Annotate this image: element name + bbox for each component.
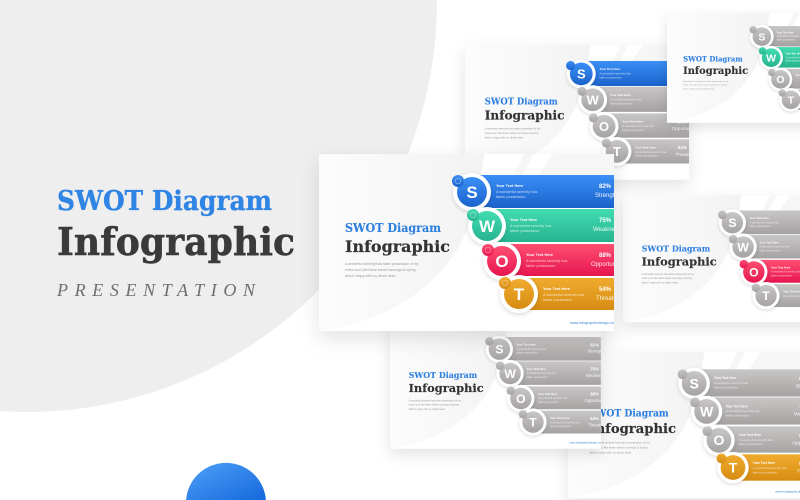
row T [602,137,692,166]
row O highlighted: Your Text Here [771,265,791,269]
slide: top right, W highlighted: which I enjoy with my whole heart. [683,87,715,90]
row O: O [599,119,609,134]
row T highlighted: T [729,459,738,475]
row S: Your Text Here [714,376,737,380]
slide: top centre, S highlighted: Infographic [485,108,565,122]
slide: centre main, all colours [319,154,622,331]
row T [779,88,800,112]
slide: middle right, O highlighted: entire soul, like these sweet mornings of spring [642,277,693,280]
row W: taken possession [527,375,548,379]
row W highlighted [759,46,800,69]
blue decorative circle [186,463,266,500]
website credit: www.infographicdesign.com [570,321,617,325]
slide: bottom left, all grey: www.infographicdesign.com [569,441,604,445]
row O: opportunity, red: taken possession [526,264,555,268]
heading: Infographic: Infographic [57,219,295,264]
row W: Your Text Here [610,93,631,97]
row S: taken possession [777,38,796,41]
slide description: A wonderful serenity has taken possession of my [345,262,419,266]
row S: A wonderful serenity has [750,220,780,224]
row W: A wonderful serenity has [760,245,790,249]
row S highlighted: Strength [675,74,692,79]
row W: W [504,367,516,381]
heading: SWOT Diagram: SWOT Diagram [57,186,272,217]
row W: W [700,403,714,419]
row W [577,85,667,116]
slide: bottom left, all grey: A wonderful serenity has taken possession of my [409,399,462,402]
row W: taken possession [610,101,633,105]
row W: weakness, teal: 75% [599,218,612,224]
subheading: Presentation: PRESENTATION [56,280,256,300]
slide: bottom right, T highlighted: which I enjoy with my whole heart. [589,450,632,454]
row W: A wonderful serenity has [726,409,760,413]
row O: A wonderful serenity has [622,124,654,128]
slide description [345,262,419,278]
row S: S [690,375,699,391]
row O: Your Text Here [739,433,761,437]
row O: A wonderful serenity has [739,438,773,442]
row S: strength, blue: 82% [599,184,612,190]
row W: Weakness [586,373,606,378]
row O highlighted: O [749,265,759,279]
row T: A wonderful serenity has [550,421,580,425]
row T highlighted [716,452,800,483]
row T: 54% [678,145,687,150]
slide heading: SWOT Diagram: SWOT Diagram [345,221,441,235]
slide: top centre, S highlighted [465,45,696,180]
row O: O [516,392,526,406]
row O [702,425,800,456]
row W: weakness, teal: A wonderful serenity has [510,224,551,228]
row O: taken possession [739,442,763,446]
slide: top right, W highlighted: A wonderful serenity has taken possession of my [683,80,729,83]
row S: Strength [587,349,604,354]
row S: A wonderful serenity has [517,347,547,351]
row T: Your Text Here [635,145,656,149]
slide: bottom left, all grey: SWOT Diagram [409,371,477,381]
row O: O [776,74,785,86]
row S highlighted: 82% [678,67,687,72]
row O [589,112,696,141]
row T [752,282,800,309]
row O: Opportunity [584,398,607,403]
slide: middle right, O highlighted: SWOT Diagram [642,244,710,254]
row S highlighted: S [577,66,586,81]
row O: Your Text Here [622,120,643,124]
row T: threats, orange: A wonderful serenity has [543,293,584,297]
row S: strength, blue: taken possession [496,195,525,199]
row S: strength, blue [452,173,618,211]
slide: top centre, S highlighted: SWOT Diagram [485,96,558,107]
row S highlighted: taken possession [600,75,622,79]
slide: bottom right, T highlighted: A wonderful serenity has taken possession of my [589,441,651,445]
row O: opportunity, red: Your Text Here [526,252,554,257]
row O: 88% [590,392,599,397]
row S: strength, blue: A wonderful serenity has [496,190,537,194]
row W: taken possession [726,413,750,417]
slide: bottom right, T highlighted: entire soul, like these sweet mornings of spring [589,446,648,450]
row W: weakness, teal [467,207,621,245]
large grey background shape [0,0,437,412]
slide: top right, W highlighted [667,13,800,123]
row T: A wonderful serenity has [635,150,667,154]
slide: bottom right, T highlighted [568,352,800,498]
row T: 54% [590,416,599,421]
row W: 75% [678,93,687,98]
slide: top centre, S highlighted: entire soul, like these sweet mornings of spring [485,131,539,135]
slide: bottom left, all grey: entire soul, like these sweet mornings of spring [409,404,460,407]
slide: bottom right, T highlighted: Infographic [589,422,676,437]
row S: strength, blue: Your Text Here [496,183,524,188]
row S [718,209,800,236]
row O: opportunity, red: A wonderful serenity has [526,259,567,263]
row O: opportunity, red [482,242,622,280]
slide: middle right, O highlighted: which I enjoy with my whole heart. [642,281,679,284]
row O: opportunity, red: 88% [599,253,612,259]
row T: T [788,95,795,107]
slide: top centre, S highlighted: A wonderful serenity has taken possession of my [485,126,541,130]
row W: W [587,92,600,107]
row S: strength, blue: Strength [595,193,618,199]
row S [485,336,604,363]
row O [507,385,607,412]
slide description: which I enjoy with my whole heart. [345,274,397,278]
row S: A wonderful serenity has [714,381,749,385]
row S highlighted: Your Text Here [600,67,620,71]
row W highlighted: W [766,52,776,64]
slide: middle right, O highlighted: Infographic [642,255,717,269]
row O [768,68,800,91]
row W: taken possession [760,248,781,252]
row S: Your Text Here [750,216,769,220]
row W [690,396,800,427]
row T: taken possession [550,424,572,428]
row S highlighted [566,60,667,90]
row W: weakness, teal: W [479,217,496,236]
row S [678,368,800,399]
row T: threats, orange: Your Text Here [543,286,571,291]
row W: Weakness [673,100,695,105]
row T: Threats [676,152,692,157]
row T: Threats [588,422,603,427]
row O: 88% [678,119,687,124]
slide heading: Infographic: Infographic [345,237,450,256]
row O: taken possession [622,128,645,132]
row S: S [728,216,736,230]
slide: bottom right, T highlighted: SWOT Diagram [589,408,669,419]
row W [496,360,606,387]
row O highlighted: taken possession [771,273,792,277]
row O highlighted [740,258,800,286]
slide: bottom left, all grey [390,322,607,449]
row T: threats, orange: taken possession [543,298,572,302]
row W: Your Text Here [726,404,748,408]
slide: bottom left, all grey: which I enjoy with my whole heart. [409,408,446,411]
row S: taken possession [714,385,738,389]
row S: 82% [590,342,599,347]
row S [749,25,800,48]
row T: T [529,415,537,429]
slide: top right, W highlighted: SWOT Diagram [683,54,743,63]
slide description: entire soul, like these sweet mornings of spring [345,268,416,272]
row S: taken possession [750,224,771,228]
row O highlighted: A wonderful serenity has [771,270,800,274]
row S: taken possession [517,350,538,354]
row T highlighted: Your Text Here [753,461,775,465]
row T [519,409,603,436]
slide: top right, W highlighted: Infographic [683,66,748,77]
row S: S [495,342,503,356]
row S highlighted: A wonderful serenity has [600,72,631,76]
row S: Your Text Here [517,343,536,347]
row T: threats, orange [499,275,616,313]
row T highlighted: A wonderful serenity has [753,466,787,470]
row W [729,233,800,261]
row W: A wonderful serenity has [610,97,642,101]
slide: top right, W highlighted: entire soul, like these sweet mornings of spring [683,84,727,87]
row T: taken possession [635,154,658,158]
row T highlighted: taken possession [753,470,777,474]
row S: S [758,31,765,43]
row W: W [737,240,749,254]
slide: bottom left, all grey: Infographic [409,381,484,395]
row O: Your Text Here [538,392,558,396]
row O: A wonderful serenity has [538,396,568,400]
main title block [56,186,295,300]
row S: strength, blue: S [466,183,478,202]
row T: T [762,289,770,303]
row W: weakness, teal: Your Text Here [510,217,538,222]
row T: Your Text Here [550,416,570,420]
slide: top centre, S highlighted: which I enjoy with my whole heart. [485,135,524,139]
row O: taken possession [538,400,559,404]
row T: threats, orange: T [514,285,525,304]
row W: Your Text Here [527,367,546,371]
row S: Your Text Here [777,31,794,34]
row O: O [714,432,725,448]
row O: opportunity, red: O [495,252,509,271]
slide: middle right, O highlighted: A wonderful serenity has taken possession of my [642,273,695,276]
row W: weakness, teal: taken possession [510,229,539,233]
slide: middle right, O highlighted [623,196,800,322]
row O: Opportunity [672,126,696,131]
row T: T [613,144,621,159]
row T: threats, orange: Threats [596,296,616,302]
row W: weakness, teal: Weakness [593,227,621,233]
row T: threats, orange: 54% [599,287,612,293]
row W: Your Text Here [760,240,779,244]
row O: opportunity, red: Opportunity [591,262,622,268]
row W: 75% [590,367,599,372]
row W: A wonderful serenity has [527,371,557,375]
